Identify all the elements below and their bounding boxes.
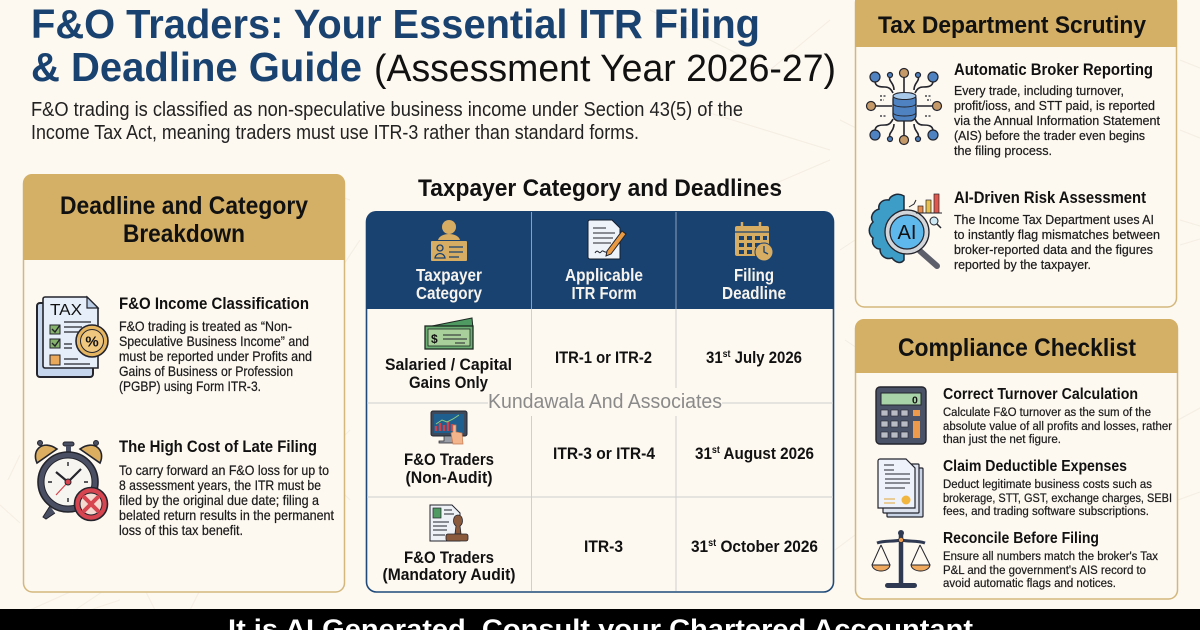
text: turnover body bbox=[943, 405, 1172, 446]
icon: cash bbox=[425, 318, 473, 349]
row: F&O traders non-audit: st bbox=[712, 445, 720, 456]
icon: AI brain magnifier bbox=[869, 194, 942, 266]
text: late filing body: To carry forward an F&O loss for up to bbox=[119, 463, 329, 478]
heading: reconcile before filing: Reconcile Before Filing bbox=[943, 530, 1099, 547]
row: F&O traders mandatory audit bbox=[382, 505, 818, 584]
text: broker reporting body: the filing process. bbox=[954, 143, 1052, 158]
icon: calculator: 0 bbox=[912, 394, 918, 406]
row: salaried: 31 bbox=[706, 348, 725, 367]
text: turnover body: absolute value of all profits and losses, rather bbox=[943, 419, 1172, 433]
text: reconcile body: Ensure all numbers match the broker's Tax bbox=[943, 549, 1158, 563]
icon: balance scales bbox=[872, 530, 930, 588]
text: classification body: Speculative Business Income” and bbox=[119, 334, 309, 349]
panel header: Breakdown bbox=[123, 220, 245, 248]
icon: audit stamp bbox=[430, 505, 468, 541]
text: risk assessment body: reported by the taxpayer. bbox=[954, 257, 1091, 272]
row: F&O traders non-audit: August 2026 bbox=[720, 444, 814, 463]
table: taxpayer categories and deadlines bbox=[366, 211, 834, 592]
row: F&O traders mandatory audit: October 2026 bbox=[716, 537, 818, 556]
text: classification body bbox=[119, 319, 312, 394]
panel header: Deadline and Category bbox=[60, 192, 308, 220]
icon: calculator bbox=[876, 387, 926, 444]
text: broker reporting body: (AIS) before the trader even begins bbox=[954, 128, 1145, 143]
row: F&O traders non-audit: 31 bbox=[695, 444, 714, 463]
row: salaried: Gains Only bbox=[409, 373, 488, 392]
panel header: Tax Department Scrutiny bbox=[878, 12, 1147, 39]
row: salaried: Salaried / Capital bbox=[385, 355, 512, 374]
text: late filing body: filed by the original due date; filing a bbox=[119, 493, 319, 508]
icon: stacked documents bbox=[878, 459, 923, 517]
row: F&O traders mandatory audit: st bbox=[708, 538, 717, 549]
row: salaried: July 2026 bbox=[730, 348, 802, 367]
text: turnover body: Calculate F&O turnover as the sum of the bbox=[943, 405, 1151, 419]
row: F&O traders mandatory audit: F&O Traders bbox=[404, 548, 494, 567]
icon: alarm clock bbox=[35, 440, 108, 520]
text: risk assessment body bbox=[954, 212, 1160, 272]
icon: tax document: TAX bbox=[50, 302, 82, 319]
panel header bbox=[23, 174, 345, 260]
watermark: Kundawala And Associates bbox=[488, 391, 722, 413]
panel: deadline and category breakdown bbox=[23, 174, 345, 592]
row: F&O traders mandatory audit: (Mandatory Audit) bbox=[382, 565, 516, 584]
text: classification body: Gains of Business or Profession bbox=[119, 364, 293, 379]
intro text: Income Tax Act, meaning traders must use ITR-3 rather than standard forms. bbox=[31, 122, 639, 144]
header labels: ITR Form bbox=[572, 283, 636, 303]
panel header bbox=[855, 0, 1177, 47]
text: broker reporting body: Every trade, including turnover, bbox=[954, 83, 1124, 98]
header labels: Deadline bbox=[722, 283, 786, 303]
header labels: Filing bbox=[734, 265, 774, 285]
row: salaried bbox=[385, 318, 802, 392]
heading: correct turnover calculation: Correct Turnover Calculation bbox=[943, 386, 1138, 403]
icon: AI brain magnifier: AI bbox=[898, 222, 916, 244]
row: F&O traders mandatory audit: ITR-3 bbox=[584, 537, 623, 556]
row: salaried: st bbox=[723, 349, 731, 360]
title: F&O Traders: Your Essential ITR Filing bbox=[31, 1, 760, 47]
text: late filing body: 8 assessment years, the ITR must be bbox=[119, 478, 321, 493]
text: expenses body: brokerage, STT, GST, exchange charges, SEBI bbox=[943, 491, 1172, 505]
table header row bbox=[366, 211, 834, 309]
header labels bbox=[416, 265, 786, 303]
icon: trading monitor bbox=[431, 411, 467, 444]
text: classification body: must be reported under Profits and bbox=[119, 349, 312, 364]
text: classification body: (PGBP) using Form ITR-3. bbox=[119, 379, 261, 394]
header labels: Applicable bbox=[565, 265, 643, 285]
text: late filing body: belated return results in the permanent bbox=[119, 508, 334, 523]
text: risk assessment body: to instantly flag mismatches between bbox=[954, 227, 1160, 242]
heading: automatic broker reporting: Automatic Broker Reporting bbox=[954, 61, 1153, 79]
text: expenses body: fees, and trading software subscriptions. bbox=[943, 504, 1149, 518]
title: & Deadline Guide bbox=[31, 44, 362, 90]
heading: high cost of late filing: The High Cost of Late Filing bbox=[119, 437, 317, 456]
heading: claim deductible expenses: Claim Deductible Expenses bbox=[943, 458, 1127, 475]
icon: cash: $ bbox=[431, 332, 438, 346]
row: F&O traders non-audit: ITR-3 or ITR-4 bbox=[553, 444, 655, 463]
intro text bbox=[31, 99, 743, 144]
heading: F&O income classification: F&O Income Classification bbox=[119, 294, 309, 313]
icon: database network bbox=[866, 68, 942, 144]
row: F&O traders non-audit: F&O Traders bbox=[404, 450, 494, 469]
row: salaried: ITR-1 or ITR-2 bbox=[555, 348, 652, 367]
footer disclaimer bar bbox=[0, 609, 1200, 630]
text: expenses body bbox=[943, 477, 1172, 518]
text: reconcile body: avoid automatic flags and notices. bbox=[943, 576, 1116, 590]
text: classification body: F&O trading is treated as “Non- bbox=[119, 319, 292, 334]
panel: compliance checklist bbox=[855, 319, 1178, 599]
title: (Assessment Year 2026-27) bbox=[374, 48, 836, 90]
heading: taxpayer category and deadlines: Taxpayer Category and Deadlines bbox=[418, 175, 782, 202]
text: risk assessment body: The Income Tax Department uses AI bbox=[954, 212, 1154, 227]
icon: tax document bbox=[37, 297, 108, 377]
text: reconcile body bbox=[943, 549, 1158, 590]
panel header bbox=[855, 319, 1178, 373]
heading: AI-driven risk assessment: AI-Driven Risk Assessment bbox=[954, 189, 1146, 207]
panel: tax department scrutiny bbox=[855, 0, 1177, 307]
icon: calendar with clock bbox=[735, 222, 773, 261]
icon: form with pen bbox=[588, 220, 626, 259]
text: turnover body: than just the net figure. bbox=[943, 432, 1061, 446]
panel header: Compliance Checklist bbox=[898, 334, 1137, 362]
icon: tax document: % bbox=[85, 334, 99, 350]
intro text: F&O trading is classified as non-speculative business income under Section 43(5) of the bbox=[31, 99, 743, 121]
title bbox=[31, 1, 836, 90]
row: F&O traders non-audit bbox=[404, 411, 814, 487]
text: broker reporting body: via the Annual Information Statement bbox=[954, 113, 1160, 128]
icon: taxpayer id card bbox=[431, 220, 467, 261]
header labels: Taxpayer bbox=[416, 265, 482, 285]
text: broker reporting body: profit/ioss, and STT paid, is reported bbox=[954, 98, 1155, 113]
text: expenses body: Deduct legitimate business costs such as bbox=[943, 477, 1152, 491]
text: late filing body bbox=[119, 463, 334, 538]
row: F&O traders non-audit: (Non-Audit) bbox=[406, 468, 492, 487]
text: late filing body: loss of this tax benefit. bbox=[119, 523, 243, 538]
header labels: Category bbox=[416, 283, 482, 303]
text: risk assessment body: broker-reported data and the figures bbox=[954, 242, 1153, 257]
text: reconcile body: P&L and the government's AIS record to bbox=[943, 563, 1146, 577]
text: broker reporting body bbox=[954, 83, 1160, 158]
row: F&O traders mandatory audit: 31 bbox=[691, 537, 710, 556]
